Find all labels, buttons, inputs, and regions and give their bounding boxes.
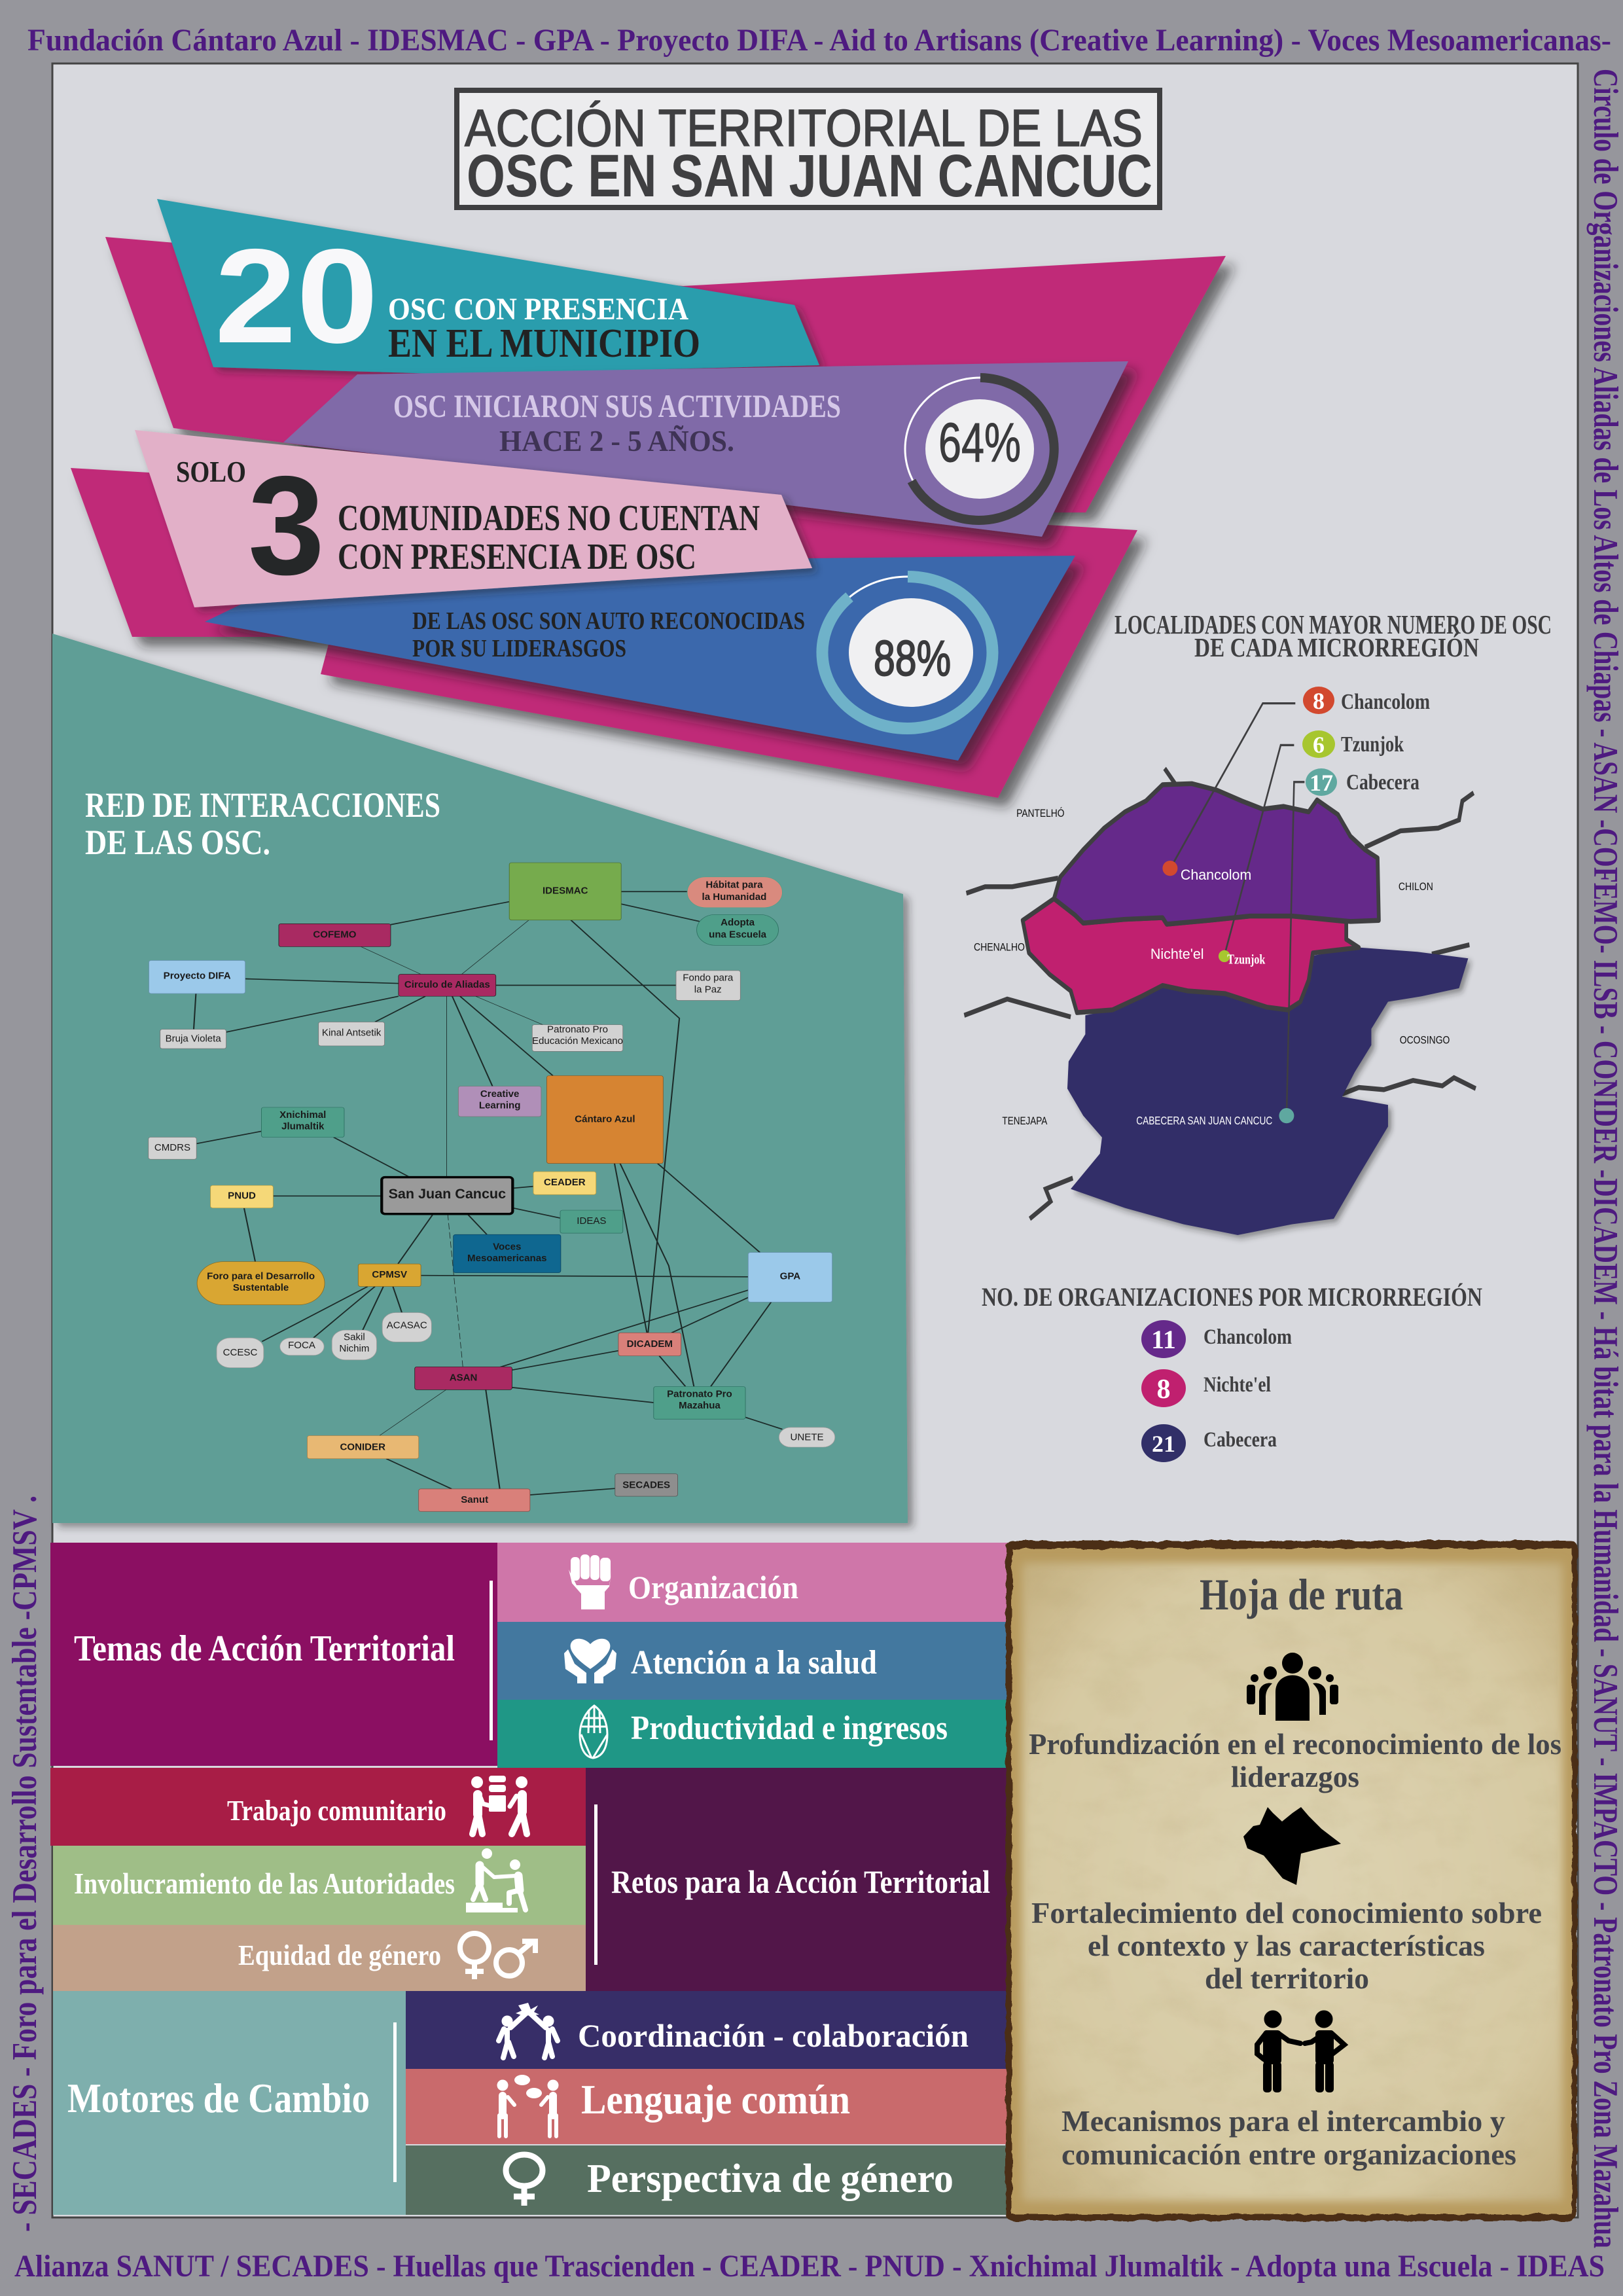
node Patronato Pro Educación: Educación Mexicano xyxy=(532,1036,623,1047)
map labels: Tzunjok xyxy=(1227,952,1266,967)
row trabajo xyxy=(50,1768,586,1846)
node Patronato Pro Educación: Patronato Pro xyxy=(547,1025,608,1035)
node CEADER: CEADER xyxy=(544,1177,586,1188)
node Kinal Antsetik xyxy=(319,1022,385,1046)
node IDEAS: IDEAS xyxy=(577,1216,607,1227)
label lenguaje: Lenguaje común xyxy=(581,2076,850,2123)
icon: heart in hands xyxy=(564,1639,616,1683)
heading: red de interacciones: DE LAS OSC. xyxy=(85,823,270,862)
node Cántaro Azul xyxy=(546,1076,663,1164)
map of microregions xyxy=(964,704,1476,1235)
node Hábitat xyxy=(687,877,782,908)
label equidad: Equidad de género xyxy=(238,1939,441,1971)
text mecanismos: comunicación entre organizaciones xyxy=(1061,2138,1516,2171)
network edges xyxy=(194,891,782,1495)
text hace 2-5 años: HACE 2 - 5 AÑOS. xyxy=(499,424,734,457)
row lenguaje xyxy=(406,2069,1007,2144)
node ASAN xyxy=(415,1367,512,1390)
legend heading: NO. DE ORGANIZACIONES POR MICRORREGIÓN xyxy=(982,1282,1482,1312)
icon: male symbol xyxy=(496,1941,535,1976)
map labels: CHILON xyxy=(1399,881,1433,893)
node Proyecto DIFA: Proyecto DIFA xyxy=(164,971,231,981)
row coordinacion xyxy=(406,1991,1007,2069)
heading hoja de ruta: Hoja de ruta xyxy=(1200,1570,1403,1619)
node Adopta: Adopta xyxy=(721,918,755,928)
legend item Tzunjok: 6 xyxy=(1313,732,1325,758)
legend item Tzunjok xyxy=(1302,730,1404,758)
node IDESMAC xyxy=(509,863,621,920)
node CCESC: CCESC xyxy=(223,1348,258,1358)
count Nichte'el: 8 xyxy=(1157,1374,1170,1405)
left border text: partner organisations: - SECADES - Foro para el Desarrollo Sustentable -CPMSV . xyxy=(6,1496,44,2232)
node Sakil Nichim: Nichim xyxy=(339,1344,369,1354)
panel: motores de cambio xyxy=(53,1991,1007,2215)
legend item Cabecera xyxy=(1306,768,1419,796)
node Fondo para la Paz: la Paz xyxy=(694,985,722,996)
row productividad xyxy=(497,1700,1008,1768)
title line 2: OSC EN SAN JUAN CANCUC xyxy=(467,143,1152,209)
node Fondo para la Paz: Fondo para xyxy=(683,973,734,983)
count Cabecera xyxy=(1141,1424,1277,1462)
map labels: CHENALHO xyxy=(974,942,1025,954)
count Chancolom: 11 xyxy=(1151,1325,1176,1354)
text profundizacion xyxy=(1029,1727,1561,1793)
icon: corn xyxy=(580,1706,607,1758)
node Xnichimal: Xnichimal xyxy=(279,1110,326,1121)
network diagram xyxy=(149,863,835,1511)
count Nichte'el: Nichte'el xyxy=(1204,1373,1271,1397)
heading motores: Motores de Cambio xyxy=(67,2075,370,2121)
node COFEMO: COFEMO xyxy=(313,930,357,940)
ribbon stats group xyxy=(71,199,1226,798)
region: Cabecera xyxy=(1067,948,1468,1235)
icon: high five xyxy=(499,2003,558,2058)
node GPA xyxy=(748,1253,832,1302)
node CMDRS: CMDRS xyxy=(154,1143,190,1153)
node Patronato Pro Mazahua xyxy=(654,1386,745,1419)
icon: people handshake on step xyxy=(466,1848,526,1912)
panel: retos para la accion territorial xyxy=(50,1768,1007,1991)
count Chancolom: Chancolom xyxy=(1204,1325,1292,1349)
title line 1: ACCIÓN TERRITORIAL DE LAS xyxy=(465,99,1143,157)
value 88%: 88% xyxy=(874,631,951,687)
map labels: Nichte'el xyxy=(1150,946,1204,963)
node FOCA xyxy=(280,1338,324,1355)
text liderasgos: POR SU LIDERASGOS xyxy=(412,635,626,662)
node SECADES: SECADES xyxy=(622,1480,670,1490)
label productividad: Productividad e ingresos xyxy=(631,1710,948,1747)
node UNETE: UNETE xyxy=(791,1433,824,1443)
heading: localidades xyxy=(1115,609,1552,662)
node Xnichimal: Jlumaltik xyxy=(281,1122,325,1132)
blue ribbon: 88% xyxy=(205,556,1075,761)
text presencia: CON PRESENCIA DE OSC xyxy=(338,537,696,577)
map labels: PANTELHÓ xyxy=(1016,807,1064,819)
row organizacion xyxy=(497,1543,1008,1622)
label atencion: Atención a la salud xyxy=(631,1644,877,1681)
map labels: OCOSINGO xyxy=(1400,1035,1450,1047)
node Foro xyxy=(197,1262,325,1305)
node San Juan Cancuc: San Juan Cancuc xyxy=(389,1186,506,1202)
value 64%: 64% xyxy=(938,412,1021,473)
text OSC con presencia: OSC CON PRESENCIA xyxy=(388,292,688,327)
donut 88% xyxy=(822,577,993,728)
text fortalecimiento: el contexto y las características xyxy=(1088,1929,1485,1962)
node Sanut: Sanut xyxy=(461,1495,488,1505)
node COFEMO xyxy=(279,924,391,946)
node GPA: GPA xyxy=(780,1271,800,1282)
text iniciaron actividades: OSC INICIARON SUS ACTIVIDADES xyxy=(393,387,841,424)
icon: Chiapas map silhouette xyxy=(1243,1807,1341,1885)
node CCESC xyxy=(217,1338,264,1368)
count Cabecera: Cabecera xyxy=(1204,1428,1277,1452)
count Chancolom xyxy=(1141,1320,1292,1358)
node ACASAC: ACASAC xyxy=(387,1321,427,1331)
node Creative Learning: Learning xyxy=(479,1100,520,1111)
number 3: 3 xyxy=(248,446,325,604)
legend item Cabecera: 17 xyxy=(1310,770,1333,796)
node CMDRS xyxy=(149,1138,196,1159)
teal ribbon: 20 OSC xyxy=(157,199,819,374)
node CPMSV: CPMSV xyxy=(372,1270,407,1280)
node Hábitat: Hábitat para xyxy=(705,880,763,891)
text solo: SOLO xyxy=(176,455,246,488)
legend item Chancolom: Chancolom xyxy=(1341,690,1430,714)
map labels: TENEJAPA xyxy=(1002,1115,1047,1127)
region: Nichte'el xyxy=(1023,899,1359,1013)
heading retos: Retos para la Acción Territorial xyxy=(611,1863,990,1900)
node IDEAS xyxy=(560,1210,623,1233)
node IDESMAC: IDESMAC xyxy=(543,886,588,897)
title box xyxy=(457,90,1160,209)
icon: people carrying xyxy=(471,1776,527,1834)
node Creative Learning xyxy=(458,1086,541,1117)
label coordinacion: Coordinación - colaboración xyxy=(578,2017,969,2054)
node Sakil Nichim xyxy=(332,1330,377,1360)
icon: female symbol xyxy=(460,1933,489,1979)
row involucramiento xyxy=(53,1846,586,1925)
node CEADER xyxy=(533,1172,596,1194)
node Proyecto DIFA xyxy=(149,960,245,994)
node Circulo de Aliadas xyxy=(399,975,496,996)
legend item Chancolom xyxy=(1303,687,1430,714)
text mecanismos: Mecanismos para el intercambio y xyxy=(1061,2104,1505,2138)
light pink ribbon: 3 comunidades xyxy=(135,430,812,607)
text comunidades: COMUNIDADES NO CUENTAN xyxy=(338,498,760,539)
map labels: CABECERA SAN JUAN CANCUC xyxy=(1136,1115,1272,1127)
icon: fist xyxy=(569,1554,612,1609)
node Adopta: una Escuela xyxy=(709,930,767,940)
node PNUD xyxy=(211,1185,273,1208)
node Kinal Antsetik: Kinal Antsetik xyxy=(322,1028,382,1038)
heading: red de interacciones xyxy=(85,785,440,862)
panel: network teal background xyxy=(52,634,908,1523)
node ASAN: ASAN xyxy=(450,1372,477,1383)
number 20: 20 xyxy=(215,221,378,371)
node CPMSV xyxy=(358,1264,421,1287)
node Voces Mesoamericanas xyxy=(454,1234,561,1272)
region: Chancolom xyxy=(1054,783,1379,924)
node FOCA: FOCA xyxy=(288,1340,315,1351)
node Patronato Pro Mazahua: Patronato Pro xyxy=(667,1390,732,1400)
node Foro: Foro para el Desarrollo xyxy=(207,1271,315,1282)
heading temas: Temas de Acción Territorial xyxy=(74,1628,455,1669)
text mecanismos xyxy=(1061,2104,1516,2171)
node Fondo para la Paz xyxy=(676,971,740,1000)
heading: localidades: DE CADA MICRORREGIÓN xyxy=(1194,632,1479,662)
legend: organisations per microregion xyxy=(982,1282,1482,1462)
heading: red de interacciones: RED DE INTERACCIONES xyxy=(85,785,440,825)
count Nichte'el xyxy=(1141,1369,1271,1407)
node Creative Learning: Creative xyxy=(480,1089,519,1100)
node Foro: Sustentable xyxy=(233,1283,289,1293)
node SECADES xyxy=(615,1474,678,1496)
map labels xyxy=(974,807,1450,1127)
node San Juan Cancuc xyxy=(382,1177,512,1214)
panel: temas de accion territorial xyxy=(50,1543,1008,1768)
node DICADEM xyxy=(618,1333,681,1355)
text auto reconocidas: DE LAS OSC SON AUTO RECONOCIDAS xyxy=(412,607,805,635)
icon: two people shaking hands xyxy=(1257,2011,1344,2092)
text fortalecimiento xyxy=(1031,1896,1542,1995)
neighbouring boundary lines xyxy=(964,768,1476,1219)
back magenta ribbon lower xyxy=(71,468,1137,798)
dot Chancolom xyxy=(1162,861,1177,876)
label trabajo: Trabajo comunitario xyxy=(227,1795,446,1827)
icon: people talking xyxy=(497,2075,558,2136)
dot Cabecera xyxy=(1279,1108,1294,1123)
legend: localities xyxy=(1302,687,1430,796)
label organizacion: Organización xyxy=(628,1569,798,1605)
node Voces Mesoamericanas: Voces xyxy=(493,1242,521,1252)
text fortalecimiento: Fortalecimiento del conocimiento sobre xyxy=(1031,1896,1542,1929)
node Sakil Nichim: Sakil xyxy=(344,1333,365,1343)
panel: hoja de ruta parchment xyxy=(1006,1541,1577,2221)
node Bruja Violeta: Bruja Violeta xyxy=(166,1034,221,1045)
text profundizacion: liderazgos xyxy=(1231,1760,1359,1793)
label perspectiva: Perspectiva de género xyxy=(587,2157,954,2201)
text en el municipio: EN EL MUNICIPIO xyxy=(388,321,700,366)
node Xnichimal xyxy=(261,1107,344,1138)
donut 64% xyxy=(905,378,1056,520)
node Hábitat: la Humanidad xyxy=(702,892,766,903)
icon: group of people xyxy=(1247,1653,1338,1721)
leader lines xyxy=(1170,704,1304,1116)
node DICADEM: DICADEM xyxy=(627,1339,673,1350)
node UNETE xyxy=(779,1427,835,1447)
node Voces Mesoamericanas: Mesoamericanas xyxy=(467,1253,546,1264)
node Bruja Violeta xyxy=(160,1030,226,1049)
node Adopta xyxy=(697,914,778,945)
row perspectiva xyxy=(406,2145,1007,2215)
node PNUD: PNUD xyxy=(228,1191,256,1201)
node CONIDER xyxy=(308,1436,419,1459)
legend item Chancolom: 8 xyxy=(1313,688,1325,714)
node ACASAC xyxy=(382,1313,431,1342)
node Patronato Pro Educación xyxy=(532,1025,623,1051)
row atencion xyxy=(497,1622,1008,1700)
node Sanut xyxy=(419,1489,530,1511)
dot Tzunjok xyxy=(1219,950,1230,962)
count Cabecera: 21 xyxy=(1152,1431,1175,1457)
node Circulo de Aliadas: Circulo de Aliadas xyxy=(404,980,490,990)
purple ribbon: 64% xyxy=(283,361,1128,537)
legend item Cabecera: Cabecera xyxy=(1346,770,1419,795)
icon: female symbol xyxy=(506,2155,543,2206)
back magenta ribbon upper xyxy=(105,237,1226,512)
legend item Tzunjok: Tzunjok xyxy=(1341,732,1404,757)
map labels: Chancolom xyxy=(1181,867,1251,884)
row equidad xyxy=(53,1925,586,1991)
text fortalecimiento: del territorio xyxy=(1205,1962,1369,1995)
node Patronato Pro Mazahua: Mazahua xyxy=(679,1401,721,1411)
label involucramiento: Involucramiento de las Autoridades xyxy=(74,1867,455,1900)
text profundizacion: Profundización en el reconocimiento de los xyxy=(1029,1727,1561,1761)
node CONIDER: CONIDER xyxy=(340,1442,385,1452)
node Cántaro Azul: Cántaro Azul xyxy=(575,1115,635,1124)
